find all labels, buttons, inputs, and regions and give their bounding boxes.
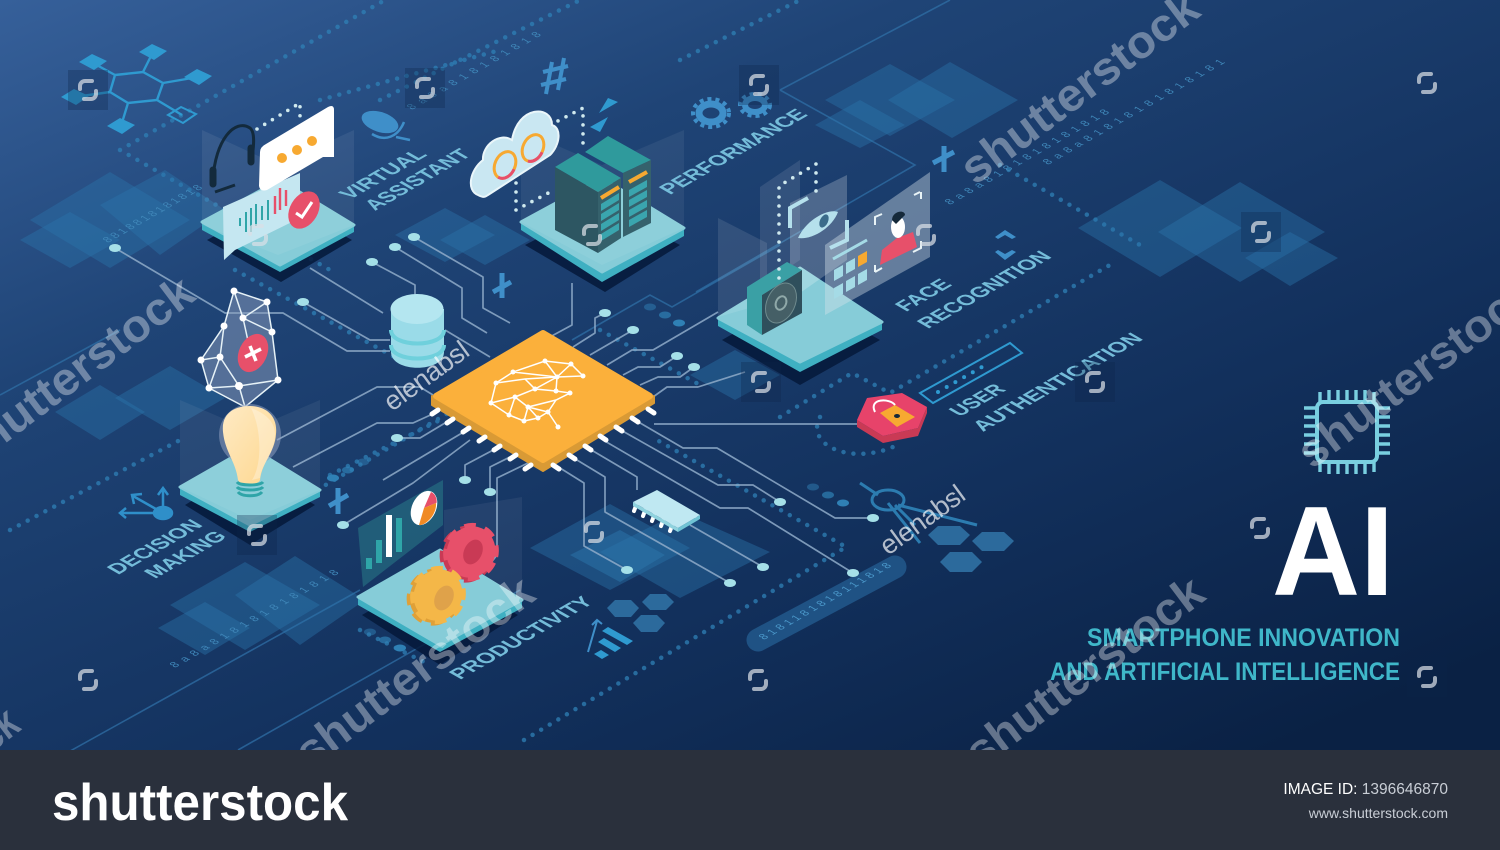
icon: small hexagons near productivity	[607, 594, 674, 632]
blue accent dots	[327, 304, 849, 652]
platform: face recognition	[718, 268, 882, 385]
watermark author: elenabsl	[874, 479, 971, 561]
chart screen	[358, 480, 443, 587]
brain network on chip	[491, 361, 583, 427]
binary strips: 8a8a8181818181818	[167, 568, 342, 670]
binary strips: 8a8a8181818181818	[942, 108, 1113, 207]
icon: gears	[693, 94, 770, 127]
subtitle: SMARTPHONE INNOVATION	[1087, 624, 1400, 652]
translucent panes	[202, 130, 278, 255]
watermark author	[378, 335, 971, 561]
check badge	[282, 186, 326, 234]
eye scan	[798, 211, 838, 238]
label: user authentication: AUTHENTICATION	[967, 330, 1148, 435]
label: user authentication: USER	[944, 381, 1011, 420]
small memory chip	[633, 490, 700, 532]
watermark text: shutterstock	[955, 565, 1214, 778]
translucent panes	[521, 130, 602, 265]
binary pill: 8181181818111818	[756, 561, 895, 642]
icon: up and down chevrons	[995, 230, 1016, 260]
circuit end pads	[109, 233, 879, 587]
binary strips: 8a8a818181818	[404, 30, 544, 112]
dotted connector	[516, 108, 583, 210]
circuit traces	[115, 237, 873, 583]
label: decision making: MAKING	[139, 528, 232, 582]
cloud	[471, 111, 559, 197]
server tower back	[585, 136, 651, 173]
platform: decision making	[180, 447, 320, 545]
label: virtual assistant: VIRTUAL	[334, 146, 432, 203]
keypad	[833, 240, 867, 259]
binary strips	[100, 30, 1228, 670]
light speech bubble with audio bars	[223, 173, 300, 260]
footer image id: IMAGE ID: 1396646870	[1283, 781, 1448, 798]
platform: virtual assistant	[202, 180, 354, 282]
icon: hash	[541, 58, 618, 132]
icon: microphone	[359, 107, 410, 140]
panel: decision making	[180, 288, 320, 545]
yellow gear	[401, 561, 471, 631]
red gear	[434, 518, 504, 588]
headset	[213, 126, 254, 192]
binary strips: 8818818181818	[100, 183, 206, 245]
title: AI: AI	[1272, 480, 1394, 622]
binary strips: 8a8a81818181818181	[1040, 58, 1228, 167]
watermark text: shutterstock	[285, 565, 544, 778]
label: productivity: PRODUCTIVITY	[444, 593, 599, 683]
icon: red lock	[857, 393, 927, 443]
footer bar	[0, 750, 1500, 850]
watermark author: elenabsl	[378, 335, 475, 417]
red x badge	[232, 329, 274, 377]
label: virtual assistant: ASSISTANT	[359, 146, 476, 214]
translucent diamond clusters	[20, 62, 1338, 655]
user login field icon	[920, 343, 1022, 403]
panel: cloud and servers	[471, 108, 684, 292]
label: decision making: DECISION	[102, 516, 208, 578]
label: performance: PERFORMANCE	[654, 106, 813, 198]
icon: AI processor outline	[1304, 390, 1390, 474]
light bulb	[219, 404, 281, 466]
icon: productivity bars	[588, 620, 633, 659]
platform: servers	[521, 178, 684, 292]
footer url: www.shutterstock.com	[1308, 805, 1448, 821]
chip pins	[432, 409, 654, 469]
icon: compass and hexagons	[860, 483, 1014, 572]
panel: productivity	[358, 480, 522, 665]
translucent panes	[718, 218, 767, 317]
face portrait	[880, 232, 917, 265]
pie chart	[406, 487, 442, 529]
label: face recognition: FACE	[890, 276, 957, 315]
camera	[747, 262, 802, 335]
database cylinder	[390, 294, 444, 368]
label: face recognition: RECOGNITION	[912, 248, 1057, 332]
central chip	[432, 333, 654, 471]
panel: virtual assistant	[202, 103, 354, 282]
icon: molecule	[61, 44, 212, 134]
translucent panes	[180, 400, 250, 520]
icon: plus signs	[329, 146, 954, 514]
background diagonal lines and dotted paths	[0, 0, 1140, 790]
watermark corner marks	[68, 65, 1447, 697]
subtitle	[1050, 624, 1400, 686]
icon: decision tree	[120, 488, 172, 519]
subtitle: AND ARTIFICIAL INTELLIGENCE	[1050, 658, 1400, 686]
platform: productivity	[358, 550, 522, 665]
server tower front	[555, 153, 621, 192]
white speech bubble	[259, 106, 334, 190]
panel: face recognition	[718, 160, 930, 385]
brain mesh	[201, 291, 278, 407]
footer logo: shutterstock	[52, 774, 348, 832]
